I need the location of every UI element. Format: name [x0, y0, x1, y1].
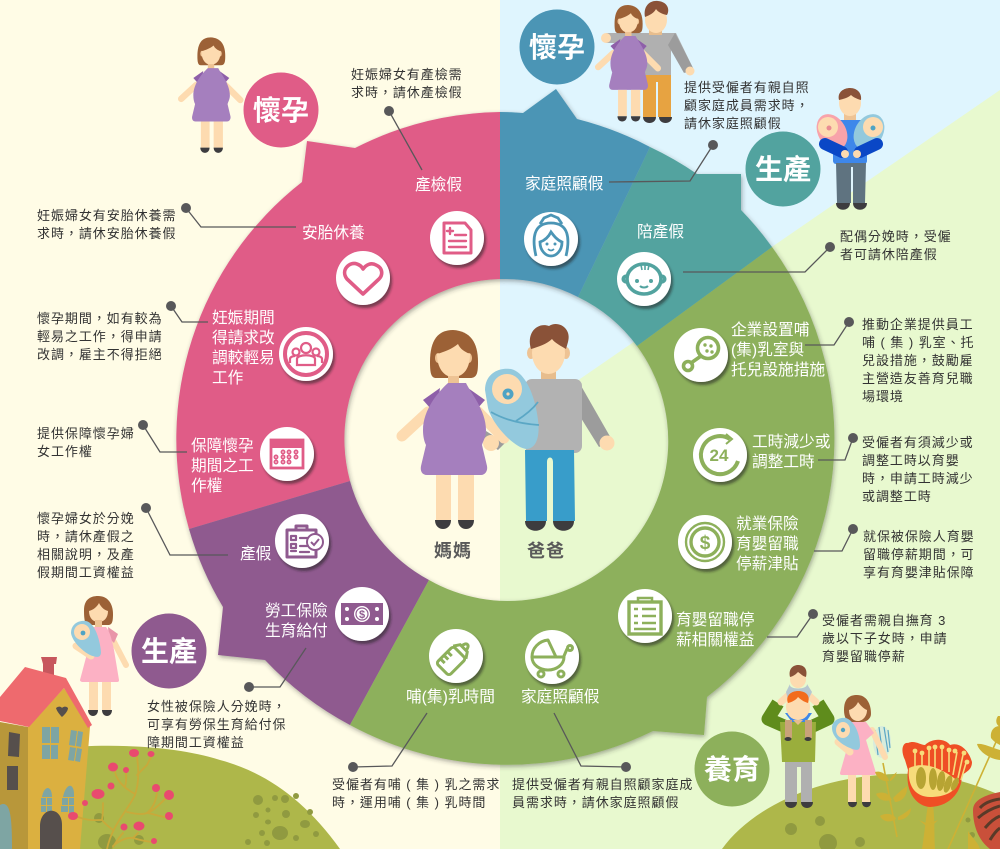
badge: nurture green: [694, 732, 770, 806]
hill dots right: [785, 816, 975, 849]
description texts: 員需求時，請休家庭照顧假: [512, 795, 679, 810]
description texts: 求時，請休產檢假: [351, 85, 463, 100]
description texts: 假期間工資權益: [37, 565, 135, 580]
flowers right: [875, 716, 1000, 849]
ring labels: 產檢假: [415, 176, 462, 194]
description texts: 障期間工資權益: [147, 735, 245, 750]
ring labels: (集)乳室與: [731, 341, 804, 359]
description texts: 顧家庭成員需求時，: [684, 98, 810, 113]
description texts: 時，申請工時減少: [862, 471, 974, 486]
ring labels: 家庭照顧假: [521, 688, 600, 706]
description texts: 兒設措施，鼓勵雇: [862, 353, 974, 368]
description texts: 可享有勞保生育給付保: [147, 717, 287, 732]
figure: pregnant woman top left: [181, 37, 240, 153]
description texts: 或調整工時: [862, 489, 932, 504]
icon: banknote: [335, 587, 389, 641]
description texts: 受僱者有須減少或: [862, 435, 974, 450]
icon: heart: [336, 251, 390, 305]
description texts: 女性被保險人分娩時，: [147, 699, 287, 714]
icon: clipboard list: [618, 589, 672, 643]
ring labels: 期間之工: [191, 457, 254, 475]
callout lines and dots: [138, 106, 858, 772]
description texts: 懷孕期間，如有較為: [37, 311, 163, 326]
description texts: 女工作權: [37, 444, 93, 459]
house: [0, 657, 92, 849]
center labels: 爸爸: [527, 541, 565, 561]
icon: checklist clipboard: [275, 514, 329, 568]
description texts: 提供保障懷孕婦: [37, 426, 135, 441]
description texts: 享有育嬰津貼保障: [863, 565, 975, 580]
description texts: 妊娠婦女有產檢需: [351, 67, 463, 82]
ring labels: 妊娠期間: [212, 309, 275, 327]
icon: calendar: [260, 427, 314, 481]
description texts: 場環境: [862, 389, 904, 404]
center labels: 媽媽: [434, 541, 472, 561]
figure: couple top: [598, 1, 694, 123]
description texts: 哺 ( 集 ) 乳室、托: [862, 335, 975, 350]
ring labels: 保障懷孕: [191, 437, 254, 455]
ring labels: 工時減少或: [752, 433, 831, 451]
icon: banknote: $: [359, 609, 365, 621]
icon: pram: [525, 630, 579, 684]
description texts: 配偶分娩時，受僱: [840, 229, 952, 244]
badge: birth purple: 生產: [141, 636, 197, 667]
figure: mother with baby left: [71, 596, 126, 716]
right hill: [722, 774, 1000, 849]
description texts: 請休家庭照顧假: [684, 116, 782, 131]
badge: birth purple: [132, 614, 206, 688]
branch with pink buds: [68, 749, 174, 849]
description texts: 者可請休陪產假: [840, 247, 938, 262]
description texts: 輕易之工作，得申請: [37, 329, 163, 344]
badge: birth teal: [746, 132, 820, 206]
description texts: 求時，請休安胎休養假: [37, 226, 177, 241]
description texts: 歲以下子女時，申請: [822, 631, 948, 646]
ring labels: 薪相關權益: [676, 631, 754, 649]
ring labels: 育嬰留職停: [676, 610, 754, 629]
ring labels: 托兒設施措施: [731, 361, 825, 379]
description texts: 受僱者有哺 ( 集 ) 乳之需求: [332, 777, 500, 792]
ring labels: 陪產假: [637, 223, 684, 241]
figure: father with twins: [810, 88, 891, 210]
badge: pregnancy blue: 懷孕: [529, 32, 585, 63]
description texts: 提供受僱者有親自照: [684, 80, 810, 95]
badge: birth teal: 生產: [755, 154, 811, 185]
description texts: 留職停薪期間，可: [863, 547, 975, 562]
hill dots left: [245, 793, 319, 846]
center labels: [434, 541, 565, 561]
segment: birth purple: [189, 481, 429, 725]
figure: central father: [482, 324, 614, 531]
ring labels: 安胎休養: [302, 224, 365, 242]
badge: pregnancy pink: 懷孕: [253, 95, 309, 126]
ring labels: 企業設置哺: [731, 321, 810, 339]
ring labels: 哺(集)乳時間: [406, 688, 495, 706]
segment: nurture green: [350, 247, 834, 765]
badge: nurture green: 養育: [704, 754, 760, 785]
description texts: 時，運用哺 ( 集 ) 乳時間: [332, 795, 486, 810]
ring labels: 調較輕易: [212, 349, 275, 367]
description texts: 推動企業提供員工: [862, 317, 974, 332]
ring labels: 調整工時: [752, 453, 815, 471]
description texts: 主營造友善育兒職: [862, 371, 974, 386]
icon: woman with tiara: [524, 212, 578, 266]
figure: family bottom right: [768, 665, 891, 808]
ring labels: 作權: [191, 477, 223, 495]
icon: coin: $: [700, 533, 711, 554]
badge: pregnancy pink: [244, 72, 318, 148]
description texts: 就保被保險人育嬰: [863, 529, 975, 544]
icon: 24 hours clock: [693, 428, 747, 482]
ring labels: 育嬰留職: [736, 534, 799, 553]
icon: baby bottle: [429, 629, 483, 683]
ring labels: 勞工保險: [265, 602, 328, 620]
icon: medical document: [430, 211, 484, 265]
description texts: 時，請休產假之: [37, 529, 135, 544]
description texts: 提供受僱者有親自照顧家庭成: [512, 777, 693, 792]
ring labels: [191, 175, 831, 706]
ring: five coloured segments: [176, 89, 834, 765]
icon: 24 hours clock: 24: [710, 446, 729, 465]
description texts: 改調，雇主不得拒絕: [37, 347, 163, 362]
description texts: 懷孕婦女於分娩: [37, 511, 135, 526]
icon: rattle: [674, 328, 728, 382]
segment: birth teal: [578, 147, 772, 346]
ring labels: 得請求改: [212, 329, 275, 347]
figure: central mother: [402, 330, 504, 529]
badge: pregnancy blue: [520, 10, 594, 84]
description texts: 育嬰留職停薪: [822, 649, 906, 664]
ring labels: 停薪津貼: [736, 555, 799, 573]
description texts: 相關說明，及產: [37, 547, 135, 562]
icon: coin: [678, 515, 732, 569]
left hill: [60, 746, 340, 849]
figure: central baby: [485, 369, 539, 449]
description texts: 妊娠婦女有安胎休養需: [37, 208, 177, 223]
ring labels: 就業保險: [736, 515, 799, 533]
ring labels: 產假: [240, 545, 272, 563]
ring labels: 家庭照顧假: [525, 175, 604, 193]
description texts: 受僱者需親自撫育 3: [822, 613, 946, 628]
ring labels: 工作: [212, 369, 244, 387]
segment: pregnancy pink: [176, 112, 500, 529]
segment: pregnancy blue: [500, 89, 650, 297]
description texts: 調整工時以育嬰: [862, 453, 960, 468]
ring labels: 生育給付: [265, 621, 328, 640]
icon: baby face: [617, 252, 671, 306]
icon: group of people in target: [279, 327, 333, 381]
